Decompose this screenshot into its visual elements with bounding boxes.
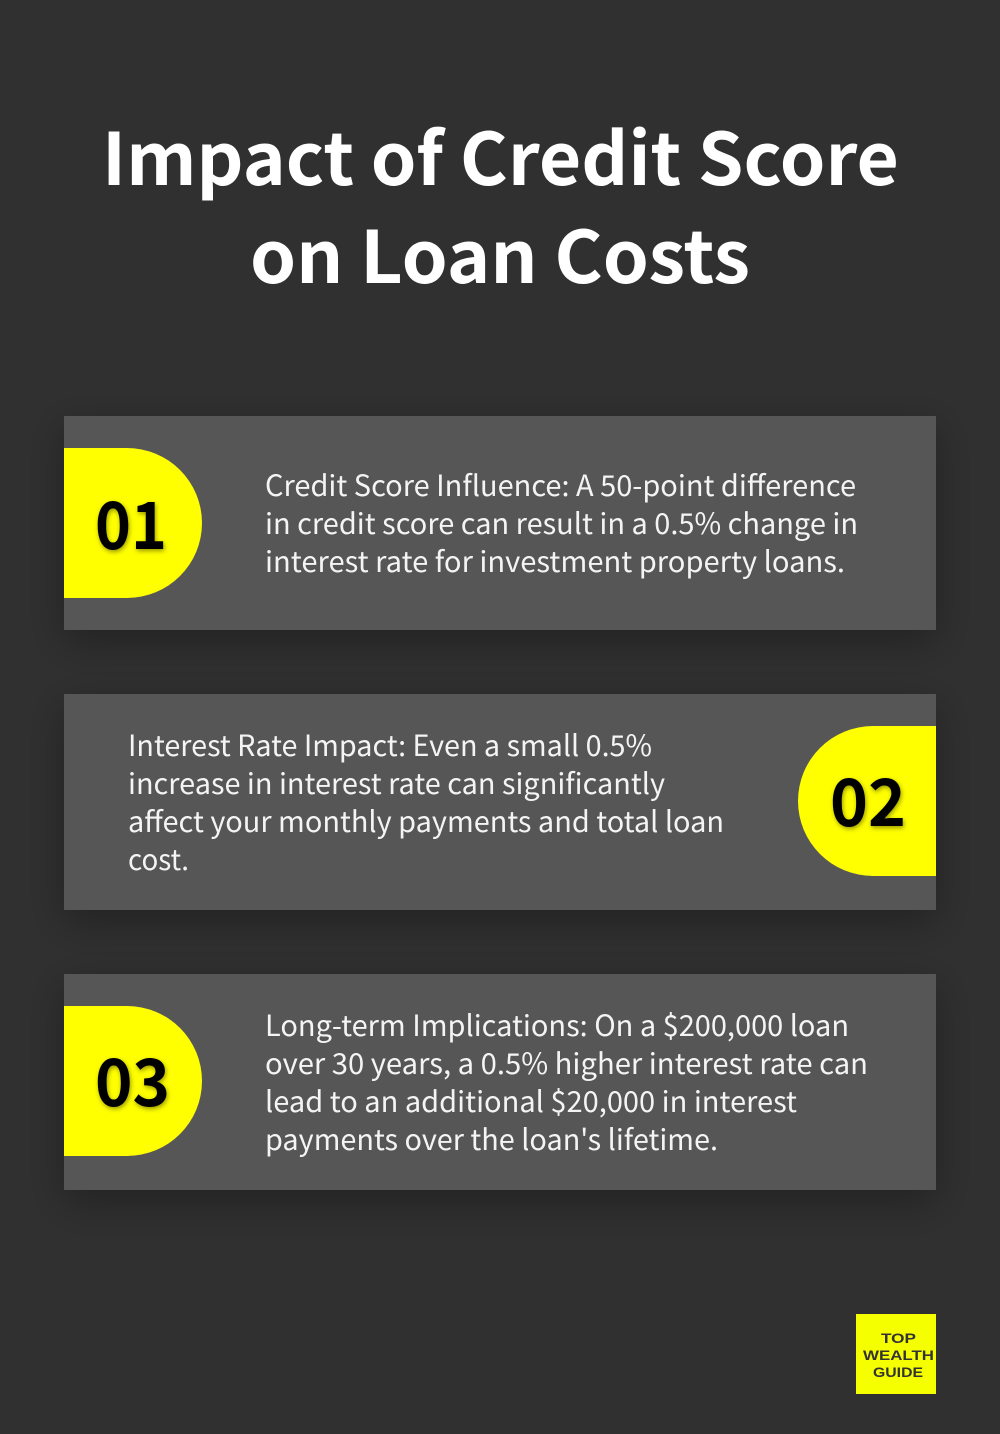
text block 1: interest rate for investment property loans. xyxy=(265,539,845,581)
text block 2 xyxy=(128,723,724,879)
logo: Top Wealth Guide: WEALTH xyxy=(863,1347,934,1363)
title: Impact of Credit Score xyxy=(102,101,899,206)
number badge 01 xyxy=(64,448,202,598)
title: on Loan Costs xyxy=(250,199,750,304)
text block 2: increase in interest rate can significantly xyxy=(128,761,665,803)
text block 3: lead to an additional $20,000 in interest xyxy=(265,1079,797,1121)
title xyxy=(102,101,899,304)
logo: Top Wealth Guide: GUIDE xyxy=(873,1364,923,1380)
panel: credit score influence xyxy=(64,416,936,630)
text block 1 xyxy=(265,463,858,581)
logo: Top Wealth Guide xyxy=(856,1314,936,1394)
text block 2: affect your monthly payments and total loan xyxy=(128,799,724,841)
text block 3 xyxy=(265,1003,868,1159)
number badge 02: 02 xyxy=(830,751,906,845)
number badge 03 xyxy=(64,1006,202,1156)
number badge 03: 03 xyxy=(95,1031,170,1125)
number badge 01: 01 xyxy=(95,474,167,568)
logo: Top Wealth Guide: TOP xyxy=(881,1330,916,1346)
text block 2: Interest Rate Impact: Even a small 0.5% xyxy=(128,723,652,765)
panel: interest rate impact xyxy=(64,694,936,910)
text block 3: over 30 years, a 0.5% higher interest rate can xyxy=(265,1041,868,1083)
text block 3: payments over the loan's lifetime. xyxy=(265,1117,718,1159)
number badge 02 xyxy=(798,726,936,876)
text block 1: in credit score can result in a 0.5% change in xyxy=(265,501,858,543)
text block 2: cost. xyxy=(128,837,189,879)
text block 3: Long-term Implications: On a $200,000 loan xyxy=(265,1003,849,1045)
text block 1: Credit Score Influence: A 50-point difference xyxy=(265,463,856,505)
panel: long-term implications xyxy=(64,974,936,1190)
